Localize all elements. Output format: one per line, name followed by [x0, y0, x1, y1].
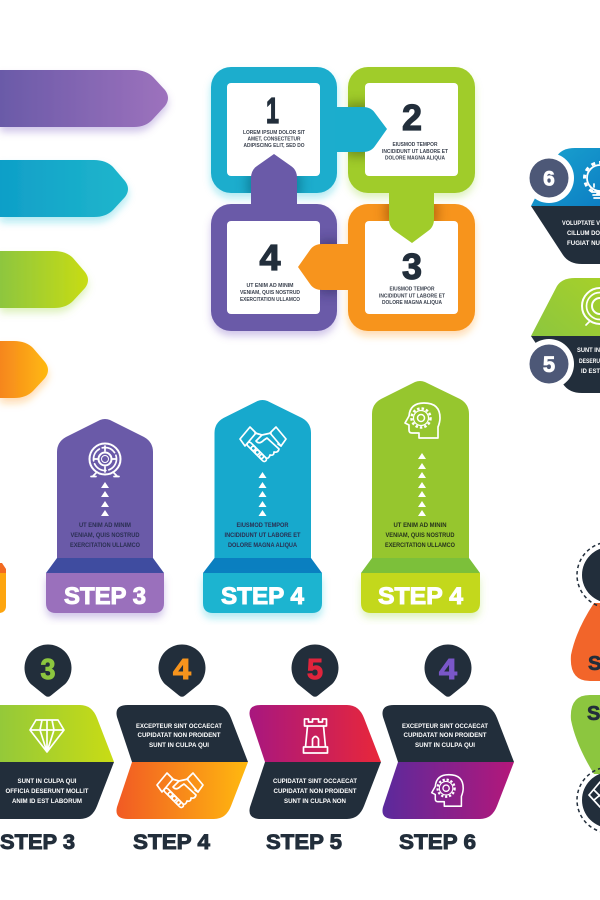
card description: DOLORE MAGNA ALIQUA [228, 542, 297, 549]
partial handshake icon [589, 782, 600, 807]
chevron text: SUNT IN CULPA QUI [18, 778, 77, 785]
dark circle [582, 772, 600, 828]
chevron step 5 [249, 705, 381, 854]
card body [372, 381, 469, 558]
connector arrow: purple to blue [251, 154, 297, 206]
chevron text: SUNT IN CULPA QUI [415, 742, 475, 749]
square frame 1: blue [211, 67, 337, 193]
step 2 text: 2 [402, 97, 422, 138]
card description: UT ENIM AD MININ [394, 522, 447, 529]
chevron top gradient [249, 705, 381, 762]
hexagon top [531, 278, 600, 336]
card footer [46, 573, 164, 613]
chevron step 3 [0, 705, 114, 854]
white panel 4 [227, 221, 320, 314]
step 1 text: 1 [266, 90, 279, 131]
location pin 4 purple: 4 [439, 654, 457, 686]
orange drop [571, 603, 600, 681]
card label: STEP 4 [221, 583, 305, 610]
chevron text [402, 723, 488, 749]
card fold band [361, 558, 480, 573]
chevron text: CUPIDATAT NON PROIDENT [404, 732, 487, 739]
hexagon top [531, 148, 600, 206]
connector arrow: blue to green [335, 107, 387, 152]
chevron top gradient [0, 705, 114, 762]
location pin 3: 3 [40, 654, 56, 686]
step 2 text [382, 97, 449, 162]
hexagon bottom [531, 336, 600, 393]
connector arrow: green to orange [389, 191, 434, 243]
dashed ring [577, 542, 600, 608]
step 1 text: AMET, CONSECTETUR [248, 136, 300, 142]
square frame 4: purple [211, 204, 337, 331]
card description: INCIDIDUNT UT LABORE ET [224, 532, 301, 539]
white panel 3 [365, 221, 458, 314]
step 1 text: LOREM IPSUM DOLOR SIT [243, 130, 305, 136]
step 2 text: DOLORE MAGNA ALIQUA [385, 156, 445, 162]
green drop [571, 695, 600, 774]
card label: STEP 4 [378, 583, 464, 610]
chevron text [136, 723, 222, 749]
connector arrow: orange to purple [298, 244, 350, 290]
card description: EXERCITATION ULLAMCO [70, 542, 140, 549]
icon: tower [304, 719, 328, 753]
chevron text: CUPIDATAT SINT OCCAECAT [273, 778, 357, 785]
step label: STEP 6 [399, 831, 476, 854]
icon: target [90, 444, 120, 476]
chevron text: OFFICIA DESERUNT MOLLIT [6, 788, 89, 795]
icon: diamond [30, 720, 64, 752]
step 1 text [243, 90, 305, 149]
chevron top dark [116, 705, 248, 762]
chevron text: CUPIDATAT NON PROIDENT [138, 732, 221, 739]
card description: UT ENIM AD MINIM [79, 522, 131, 529]
step 4 text: 4 [260, 237, 280, 278]
card description: VENIAM, QUIS NOSTRUD [386, 532, 455, 539]
chevron bottom dark [0, 762, 114, 819]
location pin 4 orange: 4 [173, 654, 191, 686]
step label: STEP 3 [0, 831, 75, 854]
chevron step 6 [382, 705, 514, 854]
right group: blue hexagon item 6 [524, 148, 600, 264]
dashed ring [577, 767, 600, 833]
chevron text [6, 778, 89, 805]
card label: STEP 3 [64, 583, 146, 610]
card fold band [46, 558, 164, 573]
hexagon bottom [531, 206, 600, 264]
card description: EXERCITATION ULLAMCO [385, 542, 455, 549]
chevron text [273, 778, 357, 805]
chevron text: ANIM ID EST LABORUM [12, 798, 82, 805]
square frame 2: green [348, 67, 475, 193]
icon: handshake [240, 427, 286, 462]
step 4 text: EXERCITATION ULLAMCO [240, 297, 301, 303]
icon: target [582, 288, 600, 325]
chevron bottom gradient [116, 762, 248, 819]
card description [224, 522, 301, 549]
dark circle [582, 547, 600, 603]
chevron text: CUPIDATAT NON PROIDENT [274, 788, 357, 795]
item 5 text [577, 347, 600, 375]
right group: green hexagon item 5 [524, 278, 600, 393]
step card: blue [203, 400, 322, 613]
card body [214, 400, 311, 558]
location pin 5: 5 [307, 654, 323, 686]
icon: upward triangles [258, 472, 266, 516]
location pin 5 [292, 644, 338, 697]
step 3 text [379, 246, 446, 306]
step card: purple [46, 419, 164, 613]
white panel 1 [227, 83, 320, 176]
chevron top dark [382, 705, 514, 762]
step 2 text: INCIDIDUNT UT LABORE ET [382, 149, 449, 155]
step 3 text: EIUSMOD TEMPOR [390, 286, 434, 292]
arrow banner: green [0, 251, 88, 308]
chevron text: EXCEPTEUR SINT OCCAECAT [136, 723, 222, 730]
right edge: green drop with dashed circle [571, 695, 600, 833]
card description [70, 522, 140, 549]
step label: STEP 4 [133, 831, 210, 854]
arrow banner: blue [0, 160, 128, 217]
card fold band [203, 558, 322, 573]
card footer [361, 573, 480, 613]
location pin 4 orange [158, 644, 206, 697]
icon: upward triangles [418, 453, 426, 516]
card description: EIUSMOD TEMPOR [236, 522, 289, 529]
step 3 text: DOLORE MAGNA ALIQUA [382, 300, 442, 306]
chevron bottom gradient [382, 762, 514, 819]
step 4 text [240, 237, 301, 303]
white panel 2 [365, 83, 458, 176]
chevron text: EXCEPTEUR SINT OCCAECAT [402, 723, 488, 730]
square frame 3: orange [348, 204, 475, 331]
partial card: orange step at left edge [0, 563, 6, 613]
card footer [203, 573, 322, 613]
step 1 text: ADIPISCING ELIT, SED DO [244, 143, 305, 149]
icon: handshake [157, 773, 203, 808]
chevron text: SUNT IN CULPA NON [284, 798, 346, 805]
step 3 text: INCIDIDUNT UT LABORE ET [379, 294, 446, 300]
step 4 text: VENIAM, QUIS NOSTRUD [240, 290, 300, 296]
icon: upward triangles [101, 482, 109, 516]
location pin 3 [24, 644, 71, 697]
step 4 text: UT ENIM AD MINIM [246, 283, 294, 289]
step label: STEP 5 [266, 831, 342, 854]
step card: green [361, 381, 480, 613]
step 3 text: 3 [402, 246, 422, 287]
location pin 4 purple [424, 644, 472, 697]
item 6 text [562, 220, 600, 247]
icon: gear and bulb [584, 162, 600, 198]
four-step square cycle [211, 67, 475, 331]
card description [385, 522, 455, 549]
number badge 5: 5 [543, 352, 555, 377]
icon: head with gear [432, 775, 463, 806]
chevron step 4 [116, 705, 248, 854]
icon: head with gear [405, 403, 440, 438]
right edge: orange drop with dashed circle [571, 542, 600, 681]
chevron bottom dark [249, 762, 381, 819]
card body [57, 419, 153, 558]
number badge 6: 6 [543, 168, 555, 190]
step 2 text: EIUSMOD TEMPOR [392, 142, 438, 148]
card description: VENIAM, QUIS NOSTRUD [70, 532, 140, 539]
arrow banner: purple [0, 70, 168, 127]
chevron text: SUNT IN CULPA QUI [149, 742, 209, 749]
arrow banner: orange [0, 341, 48, 398]
